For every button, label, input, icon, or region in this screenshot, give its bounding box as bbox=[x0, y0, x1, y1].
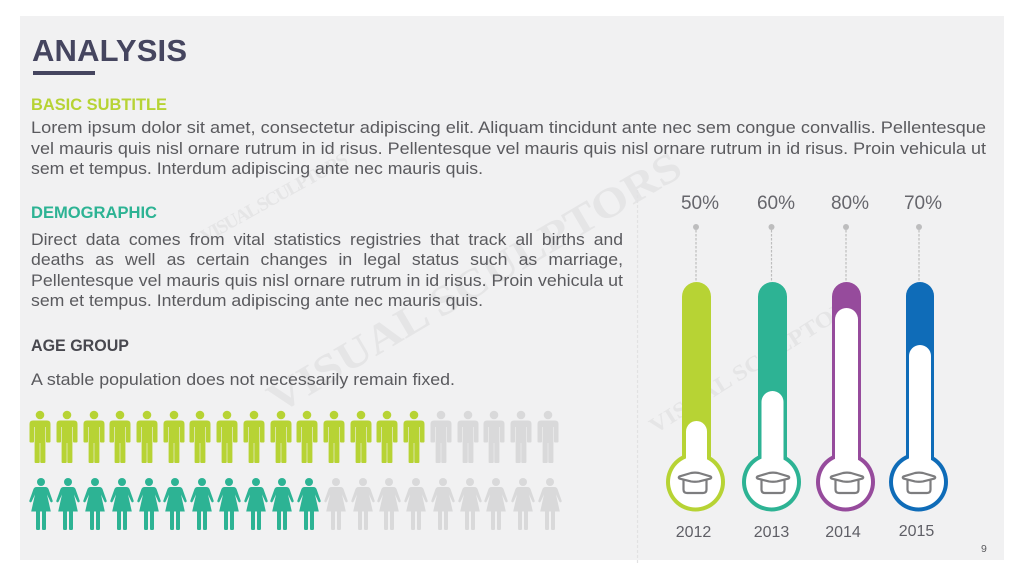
watermark: VISUAL SCULPTORS bbox=[197, 149, 352, 247]
watermark: VISUAL SCULPTORS bbox=[644, 287, 865, 438]
text block: basic subtitle bbox=[31, 96, 986, 178]
text block: demographic: deaths as well as certain changes in legal status such as marriage, bbox=[31, 250, 623, 269]
text block: demographic bbox=[31, 204, 623, 310]
pictogram: male row bbox=[30, 411, 558, 463]
thermometer chart: 2012 50%: 2012 bbox=[676, 524, 711, 541]
watermark bbox=[197, 143, 865, 438]
text block: basic subtitle: Lorem ipsum dolor sit amet, consectetur adipiscing elit. Aliquam tincidunt ante nec sem congue convallis. Pellentesque bbox=[31, 118, 986, 137]
thermometer chart: 2014 80%: 80% bbox=[831, 193, 869, 214]
page number: 9 bbox=[981, 543, 987, 555]
text block: basic subtitle: BASIC SUBTITLE bbox=[31, 96, 167, 114]
thermometer chart: 2014 80%: 2014 bbox=[825, 524, 861, 541]
thermometer chart: 2013 60%: 60% bbox=[757, 193, 795, 214]
thermometer chart: 2015 70% bbox=[889, 193, 948, 540]
thermometer chart: 2013 60%: 2013 bbox=[754, 524, 789, 541]
text block: demographic: sem et tempus. Interdum adipiscing ante nec mauris quis. bbox=[31, 291, 483, 310]
pictogram: female row bbox=[29, 478, 562, 530]
text block: demographic: DEMOGRAPHIC bbox=[31, 204, 157, 222]
thermometer chart: 2015 70%: 70% bbox=[904, 193, 942, 214]
text block: age group: A stable population does not necessarily remain fixed. bbox=[31, 370, 455, 389]
thermometer chart: 2013 60% bbox=[742, 193, 801, 541]
thermometer chart: 2015 70%: 2015 bbox=[899, 523, 934, 540]
text block: demographic: Pellentesque vel mauris quis nisl ornare rutrum in id risus. Proin vehicula ut bbox=[31, 271, 623, 290]
watermark: VISUAL SCULPTORS bbox=[260, 143, 690, 423]
title: ANALYSIS bbox=[32, 33, 187, 68]
thermometer chart: 2012 50% bbox=[666, 193, 725, 541]
text block: basic subtitle: vel mauris quis nisl ornare rutrum in id risus. Pellentesque vel mauris quis nisl ornare rutrum in id risus. Proin vehicula ut bbox=[31, 139, 986, 158]
text block: basic subtitle: sem et tempus. Interdum adipiscing ante nec mauris quis. bbox=[31, 159, 483, 178]
thermometer chart: 2012 50%: 50% bbox=[681, 193, 719, 214]
text block: age group bbox=[31, 337, 455, 389]
thermometer chart: 2014 80% bbox=[816, 193, 875, 541]
text block: age group: AGE GROUP bbox=[31, 337, 129, 355]
text block: demographic: Direct data comes from vital statistics registries that track all births and bbox=[31, 230, 623, 249]
